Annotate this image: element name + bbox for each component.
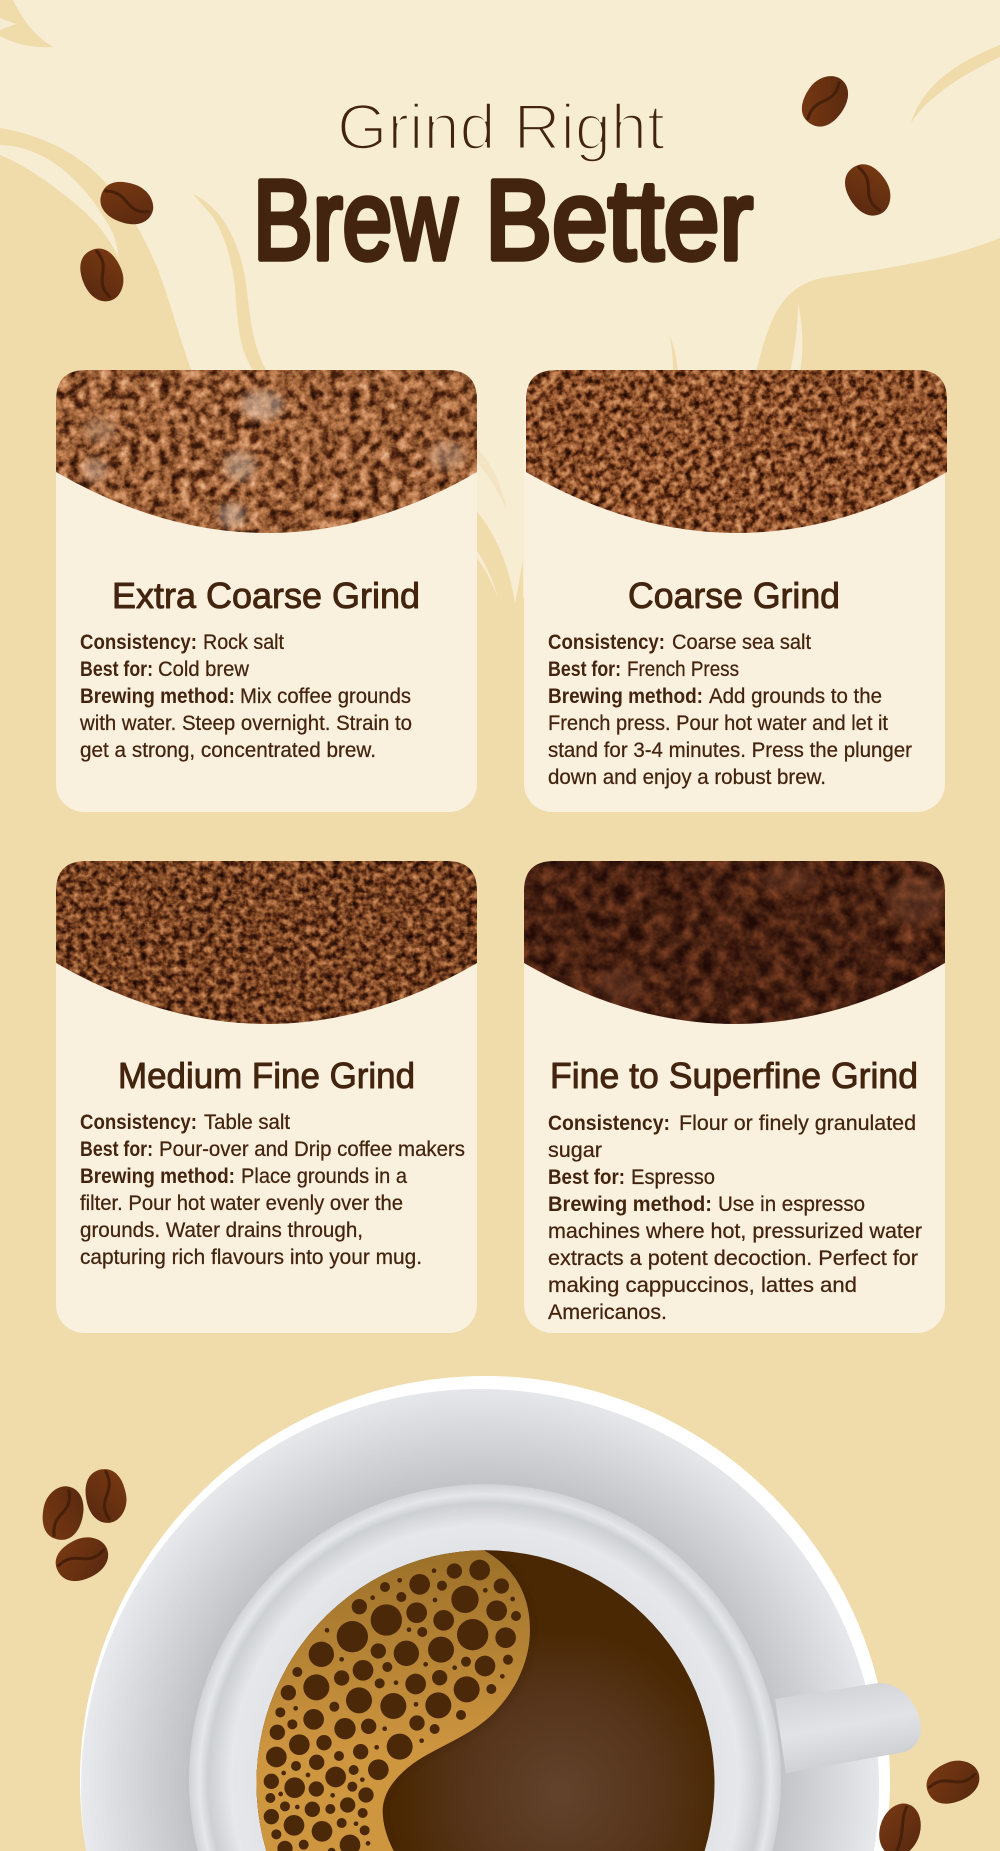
illustration: coffee cup on saucer (80, 1376, 921, 1851)
title: Brew Better: Better (485, 157, 753, 283)
text: medium fine details: Consistency: (80, 1111, 197, 1134)
text: medium fine details: capturing rich flavours into your mug. (80, 1246, 422, 1269)
panel: coarse grind (524, 370, 947, 812)
icon: coffee beans right cluster (879, 1753, 986, 1851)
text: coarse details: Consistency: (548, 631, 665, 654)
text: fine details: Use in espresso (718, 1193, 865, 1216)
text: fine details: sugar (548, 1139, 602, 1162)
panel: extra coarse grind (56, 370, 477, 812)
text: medium fine details: Table salt (204, 1111, 290, 1134)
text: extra coarse details: Brewing method: (80, 685, 235, 708)
text: coarse details: French Press (627, 658, 739, 681)
text: medium fine details: Brewing method: (80, 1165, 235, 1188)
coffee surface (256, 1550, 714, 1851)
cup rim (189, 1484, 781, 1851)
text: extra coarse details: get a strong, concentrated brew. (80, 739, 376, 762)
title: Brew Better: Brew (253, 157, 457, 283)
icon: coffee beans left cluster (38, 1466, 130, 1589)
text: fine details: Espresso (631, 1166, 715, 1189)
icon: coffee bean right (837, 157, 899, 223)
icon: coffee bean top right (793, 67, 857, 135)
text: medium fine details: Best for: (80, 1138, 153, 1161)
icon: coffee bean left (73, 242, 131, 308)
text: fine details: Consistency: (548, 1112, 670, 1135)
saucer (80, 1376, 890, 1851)
text: fine details: Brewing method: (548, 1193, 712, 1216)
text: extra coarse details (79, 631, 412, 762)
heading: coarse grind: Coarse Grind (628, 575, 840, 616)
photo: fine grounds (524, 861, 945, 1031)
text: coarse details: stand for 3-4 minutes. Press the plunger (548, 739, 912, 762)
title: Brew Better (253, 157, 753, 283)
text: medium fine details: grounds. Water drains through, (80, 1219, 363, 1242)
text: extra coarse details: Consistency: (80, 631, 197, 654)
text: medium fine details (80, 1111, 465, 1269)
text: fine details: machines where hot, pressurized water (548, 1220, 922, 1243)
text: extra coarse details: Mix coffee grounds (240, 685, 411, 708)
text: extra coarse details: Rock salt (203, 631, 284, 654)
text: coarse details: Brewing method: (548, 685, 703, 708)
crema with bubbles (250, 1550, 530, 1851)
panel: fine to superfine grind (524, 861, 945, 1333)
photo: medium fine grounds (56, 861, 477, 1031)
icon: coffee bean top left (95, 175, 159, 231)
text: fine details (548, 1112, 922, 1324)
text: extra coarse details: with water. Steep overnight. Strain to (79, 712, 412, 735)
cup handle (775, 1683, 921, 1773)
text: extra coarse details: Best for: (80, 658, 153, 681)
text: medium fine details: Pour-over and Drip coffee makers (159, 1138, 465, 1161)
text: fine details: Flour or finely granulated (679, 1112, 916, 1135)
text: coarse details: Coarse sea salt (672, 631, 811, 654)
text: fine details: Americanos. (548, 1301, 667, 1324)
title: Grind Right: Grind Right (337, 91, 665, 163)
heading: extra coarse grind: Extra Coarse Grind (112, 575, 420, 616)
text: coarse details: Best for: (548, 658, 621, 681)
text: fine details: making cappuccinos, lattes and (548, 1274, 857, 1297)
text: fine details: extracts a potent decoction. Perfect for (548, 1247, 918, 1270)
text: fine details: Best for: (548, 1166, 625, 1189)
text: coarse details: Add grounds to the (709, 685, 882, 708)
text: medium fine details: Place grounds in a (241, 1165, 407, 1188)
text: coarse details: French press. Pour hot water and let it (548, 712, 888, 735)
text: coarse details: down and enjoy a robust brew. (548, 766, 826, 789)
photo: extra coarse grounds (56, 370, 477, 540)
heading: fine to superfine grind: Fine to Superfine Grind (550, 1055, 918, 1096)
photo: coarse grounds (526, 370, 947, 540)
text: extra coarse details: Cold brew (158, 658, 250, 681)
heading: medium fine grind: Medium Fine Grind (118, 1055, 415, 1096)
text: medium fine details: filter. Pour hot water evenly over the (80, 1192, 403, 1215)
panel: medium fine grind (56, 861, 477, 1333)
text: coarse details (548, 631, 912, 789)
